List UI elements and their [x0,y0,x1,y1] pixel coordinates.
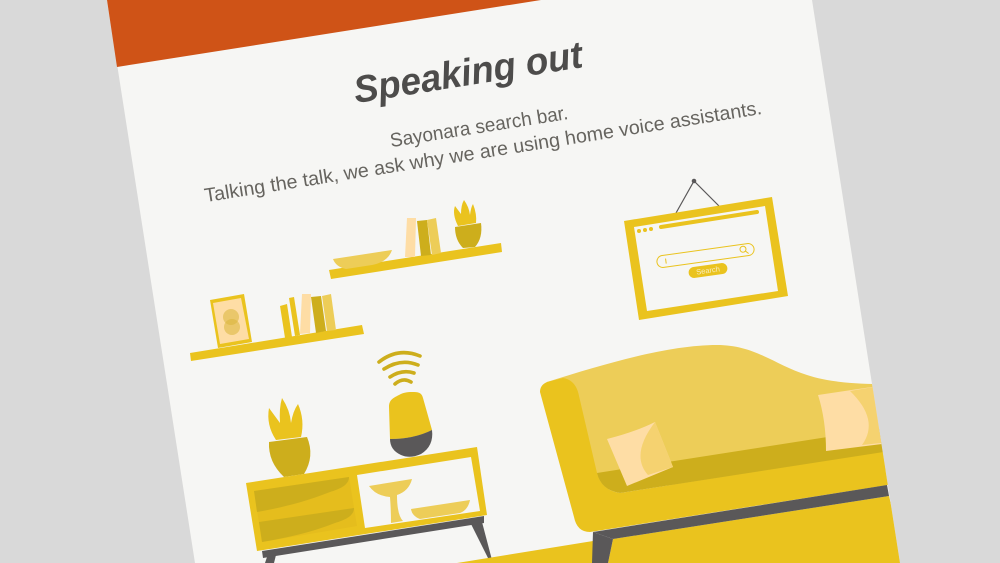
wall picture: browser search page [624,179,788,320]
subtitle line 2: Talking the talk, we ask why we are using home voice assistants. [203,97,763,207]
left pillow [607,422,673,486]
smart speaker with sound waves [379,353,432,457]
hanging wire [676,179,719,213]
bowl in cabinet [411,500,470,519]
drawer fronts [254,477,357,542]
sound waves [379,353,420,384]
sofa base and leg [592,485,889,563]
search box [656,243,755,268]
upper shelf with bowl, books and plant [329,200,502,279]
sideboard cabinet [246,447,492,563]
browser dots [637,227,653,233]
orange header band [107,0,541,67]
cabinet opening [357,457,480,528]
cabinet legs and base [262,516,492,563]
books [405,218,441,257]
search button [688,262,728,279]
drawers [254,477,354,542]
search button: Search [696,264,720,277]
infographic canvas [107,0,900,563]
sofa, floor and pillows [457,345,905,563]
books [280,294,336,338]
potted plant on cabinet [268,398,310,477]
lower shelf with photo frame and books [190,294,364,361]
right pillow [818,386,882,451]
potted plant [454,200,481,248]
address bar [661,212,757,227]
goblet ornament [369,479,412,523]
title: Speaking out [351,34,587,112]
photo frame [210,294,252,348]
bowl [333,250,392,269]
panel: tilted page [107,0,900,563]
sofa back [547,345,890,490]
sofa body and arm [540,378,900,532]
seat shadow [597,428,890,493]
floor [457,541,593,563]
subtitle line 1: Sayonara search bar. [388,102,570,152]
